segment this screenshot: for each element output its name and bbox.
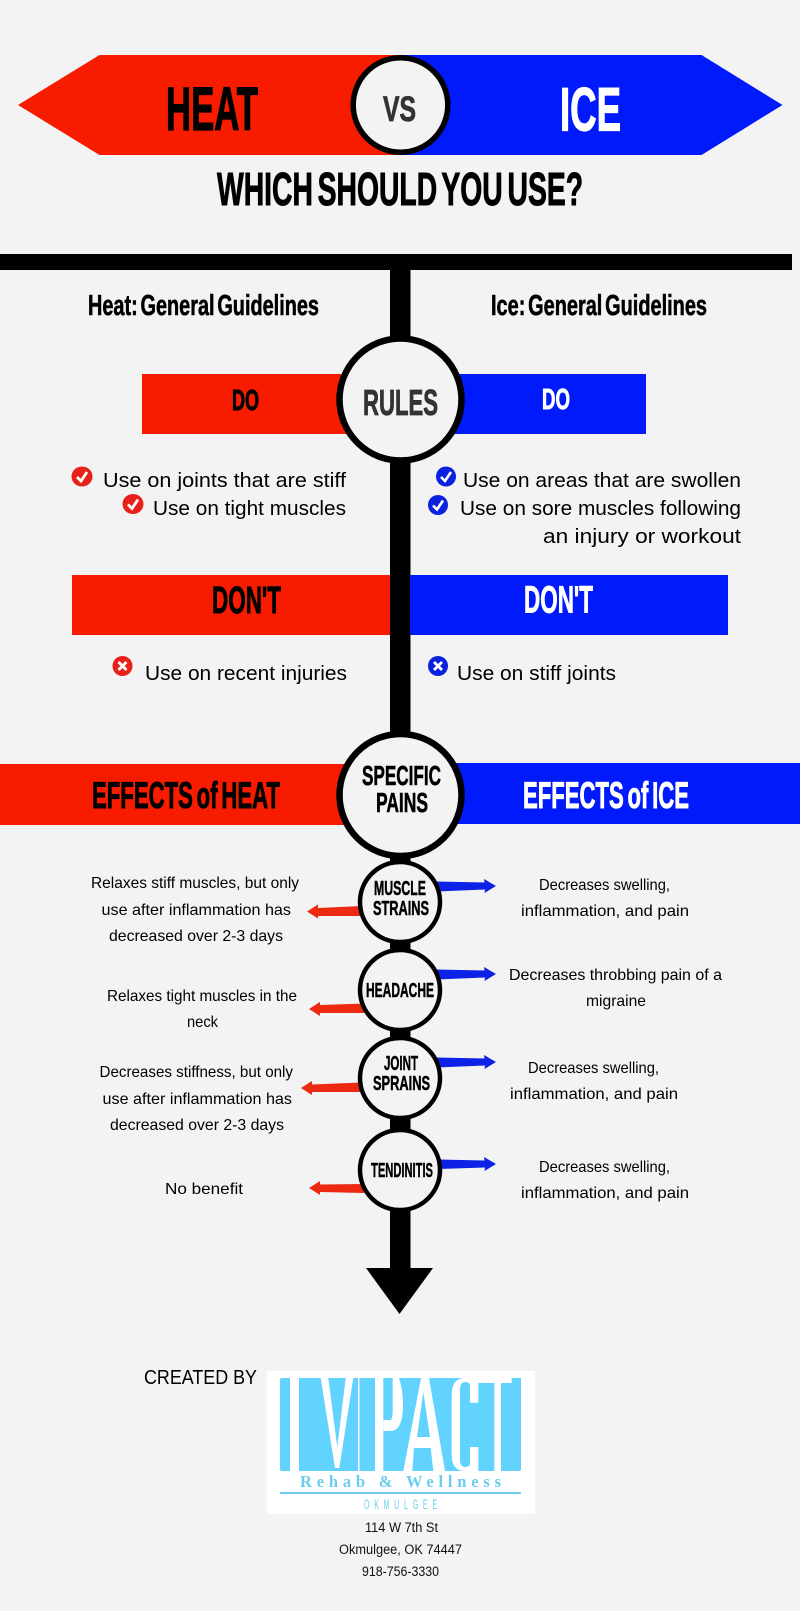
- text: headache ice effect: migraine: [586, 993, 646, 1010]
- node: joint sprains: SPRAINS: [373, 1073, 430, 1095]
- vs badge: VS: [383, 90, 416, 129]
- vs badge: [353, 58, 448, 152]
- heading: ice guidelines: Ice: General Guidelines: [491, 290, 707, 322]
- heat do list: Use on joints that are stiff: [103, 470, 346, 492]
- text: tendinitis ice effect: Decreases swelling,: [539, 1159, 670, 1176]
- heading: ice: ICE: [560, 76, 621, 144]
- band: effects of heat: [0, 764, 350, 825]
- text: muscle strains ice effect: inflammation, and pain: [521, 903, 689, 920]
- icon: blue check: [428, 495, 448, 515]
- arrow: headache ice: [437, 967, 496, 981]
- badge: rules: RULES: [363, 382, 438, 423]
- ice don't item: [428, 656, 616, 685]
- band: effects of ice: [450, 763, 800, 824]
- badge: specific pains: [340, 734, 462, 856]
- text: joint sprains ice effect: inflammation, and pain: [510, 1086, 678, 1103]
- heading: heat guidelines: Heat: General Guidelines: [88, 290, 319, 322]
- ice do list: Use on sore muscles following: [460, 498, 741, 520]
- central timeline with top bar: [0, 254, 792, 1314]
- band: heat don't: [72, 575, 390, 635]
- text: muscle strains heat effect: use after inflammation has: [102, 902, 291, 919]
- badge: specific pains: PAINS: [376, 787, 428, 818]
- icon: red cross: [112, 656, 132, 676]
- logo: impact rehab and wellness: Rehab & Wellness: [300, 1472, 502, 1491]
- node: joint sprains: [360, 1038, 440, 1118]
- arrow: joint sprains ice: [437, 1055, 496, 1069]
- text: joint sprains heat effect: Decreases stiffness, but only: [100, 1064, 293, 1081]
- address: [339, 1520, 462, 1579]
- address: 114 W 7th St: [365, 1520, 438, 1535]
- header banner: [18, 55, 782, 155]
- logo: impact rehab and wellness: OKMULGEE: [364, 1498, 437, 1513]
- band: ice don't: [410, 575, 728, 635]
- band: heat don't: DON'T: [212, 580, 281, 622]
- band: effects of ice: EFFECTS of ICE: [523, 775, 689, 816]
- text: muscle strains heat effect: decreased over 2-3 days: [109, 928, 283, 945]
- node: joint sprains: JOINT: [384, 1053, 418, 1075]
- band: ice don't: DON'T: [524, 580, 593, 622]
- ice don't item: Use on stiff joints: [457, 663, 616, 685]
- band: ice do: [450, 374, 646, 434]
- text: muscle strains ice effect: [521, 877, 689, 920]
- arrow: headache heat: [309, 1002, 365, 1016]
- arrow: muscle strains ice: [437, 879, 496, 893]
- address: Okmulgee, OK 74447: [339, 1542, 462, 1557]
- text: joint sprains ice effect: [510, 1060, 678, 1103]
- heat don't item: Use on recent injuries: [145, 663, 347, 685]
- ice do list: [428, 466, 741, 548]
- created by label: CREATED BY: [144, 1367, 257, 1389]
- arrow: tendinitis heat: [309, 1181, 364, 1195]
- node: muscle strains: STRAINS: [373, 898, 429, 920]
- text: joint sprains heat effect: use after inflammation has: [102, 1091, 292, 1108]
- band: effects of heat: EFFECTS of HEAT: [92, 775, 280, 816]
- band: heat do: DO: [232, 385, 259, 417]
- text: tendinitis heat effect: No benefit: [165, 1181, 244, 1198]
- text: headache ice effect: [509, 967, 722, 1010]
- text: joint sprains ice effect: Decreases swelling,: [528, 1060, 659, 1077]
- node: muscle strains: [360, 862, 440, 942]
- node: tendinitis: [360, 1130, 440, 1210]
- text: headache heat effect: [107, 988, 297, 1031]
- band: heat do: [142, 374, 352, 434]
- arrow: muscle strains heat: [307, 904, 362, 918]
- ice do list: an injury or workout: [543, 526, 741, 548]
- heat don't item: [112, 656, 347, 685]
- heading: heat: HEAT: [166, 75, 258, 143]
- text: headache heat effect: neck: [187, 1014, 219, 1031]
- text: headache ice effect: Decreases throbbing pain of a: [509, 967, 722, 984]
- heat do list: [72, 466, 346, 520]
- title: WHICH SHOULD YOU USE?: [217, 163, 583, 215]
- text: tendinitis ice effect: inflammation, and pain: [521, 1185, 689, 1202]
- text: joint sprains heat effect: [100, 1064, 293, 1134]
- arrow: joint sprains heat: [301, 1081, 361, 1095]
- icon: red check: [72, 466, 92, 486]
- logo: impact rehab and wellness: [267, 1371, 535, 1514]
- icon: red check: [122, 494, 144, 514]
- icon: blue cross: [428, 656, 448, 676]
- node: tendinitis: TENDINITIS: [371, 1160, 433, 1182]
- arrow: tendinitis ice: [439, 1157, 496, 1171]
- node: headache: [360, 950, 440, 1030]
- text: headache heat effect: Relaxes tight muscles in the: [107, 988, 297, 1005]
- ice do list: Use on areas that are swollen: [463, 470, 741, 492]
- node: headache: HEADACHE: [366, 980, 434, 1002]
- heat do list: Use on tight muscles: [153, 498, 346, 520]
- text: muscle strains heat effect: Relaxes stiff muscles, but only: [91, 875, 299, 892]
- logo: impact rehab and wellness: IMPACT: [280, 1349, 521, 1500]
- text: tendinitis ice effect: [521, 1159, 689, 1202]
- text: muscle strains ice effect: Decreases swelling,: [539, 877, 670, 894]
- text: joint sprains heat effect: decreased over 2-3 days: [110, 1117, 284, 1134]
- badge: rules: [340, 338, 462, 460]
- icon: blue check: [436, 466, 456, 486]
- address: 918-756-3330: [362, 1564, 439, 1579]
- band: ice do: DO: [542, 384, 570, 416]
- badge: specific pains: SPECIFIC: [362, 760, 441, 791]
- text: muscle strains heat effect: [91, 875, 299, 945]
- node: muscle strains: MUSCLE: [374, 878, 426, 900]
